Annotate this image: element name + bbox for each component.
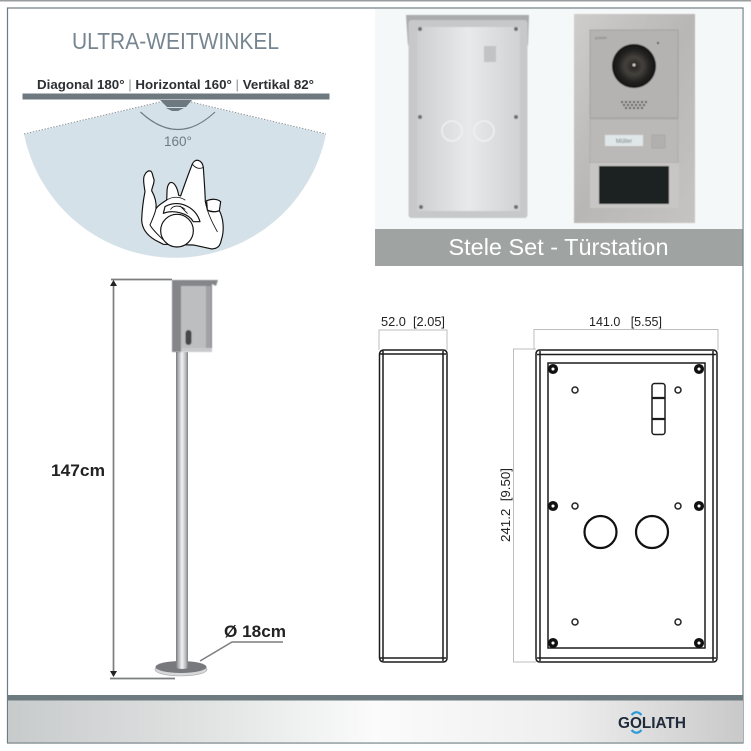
- dimension: width: [534, 314, 718, 350]
- logo: Goliath: GOLIATH: [618, 715, 686, 732]
- housing outline: [536, 350, 717, 662]
- dimension: depth: [379, 314, 447, 350]
- dimension: height: [498, 349, 536, 662]
- caption band: Stele Set - Türstation: [448, 234, 668, 260]
- dimension: height: 241.2 [9.50]: [498, 468, 513, 542]
- camera module: goliath: [595, 35, 607, 40]
- camera module: [590, 30, 678, 118]
- height label: 147cm: [51, 462, 105, 480]
- viewing angle specifications: Diagonal 180° | Horizontal 160° | Vertikal 82°: [37, 77, 314, 92]
- title: ULTRA-WEITWINKEL: [72, 28, 279, 54]
- photo: surface mount housing: [406, 15, 529, 218]
- base diameter leader: [200, 642, 283, 661]
- dimension: depth: 52.0 [2.05]: [381, 314, 445, 329]
- caption band: [375, 229, 742, 266]
- RFID module: [590, 163, 679, 208]
- dimension: width: 141.0 [5.55]: [589, 314, 662, 329]
- base diameter label: Ø 18cm: [224, 623, 286, 641]
- side outline: [380, 350, 447, 662]
- mounting screws: [550, 366, 702, 646]
- cable openings: [584, 516, 668, 548]
- angle label: 160°: [164, 134, 192, 149]
- panel: front view drawing: [498, 314, 718, 662]
- stele base: [155, 660, 207, 676]
- photo background: [375, 9, 742, 229]
- wall bar: [22, 94, 330, 100]
- panel: side view drawing: [379, 314, 447, 662]
- height dimension line: [110, 280, 175, 678]
- panel: stele with dimensions: [51, 280, 286, 678]
- latch: [652, 384, 665, 434]
- stele pole: [176, 352, 188, 666]
- small holes: [572, 387, 681, 625]
- field of view wedge: [24, 102, 326, 258]
- angle arc: [140, 112, 215, 130]
- footer: [8, 695, 743, 742]
- back plate: [548, 363, 705, 648]
- footer gradient: [8, 700, 743, 742]
- call button module: Müller: [616, 139, 632, 145]
- stele housing: [172, 280, 218, 352]
- photo: door station: [574, 14, 695, 223]
- call button module: [590, 119, 678, 163]
- icon: camera dome: [160, 100, 192, 111]
- panel: ultra wide angle diagram: [22, 28, 330, 258]
- icon: person from above: [142, 160, 223, 249]
- panel: product photos: [375, 9, 742, 266]
- footer band: [8, 695, 743, 700]
